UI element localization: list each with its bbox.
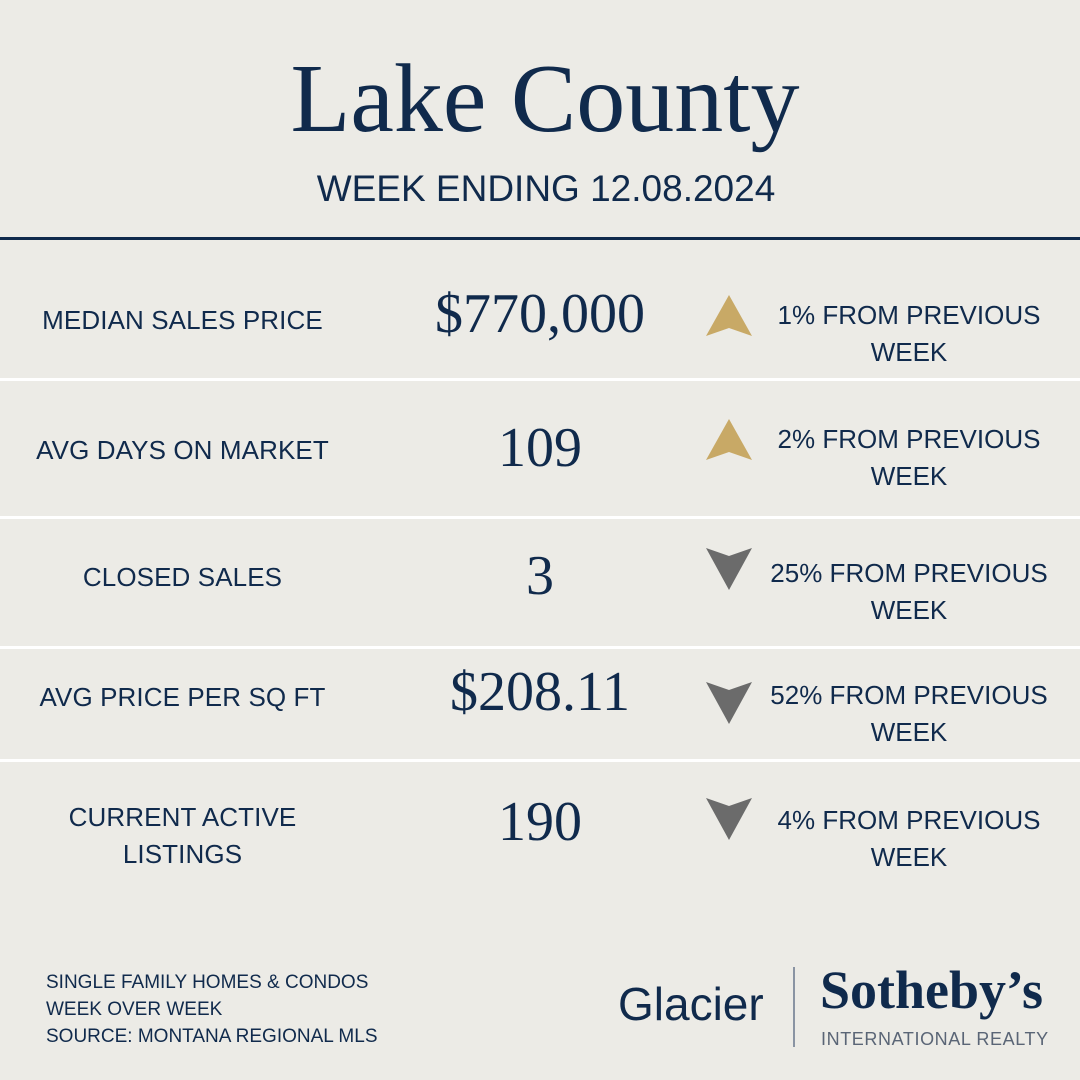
change text: WEEK — [871, 595, 947, 625]
icon: up arrow — [706, 419, 752, 460]
row: closed sales — [83, 545, 1048, 625]
label — [69, 802, 296, 869]
change text — [778, 424, 1040, 491]
logo: Sotheby’s — [820, 960, 1043, 1020]
change text: 25% FROM PREVIOUS — [770, 558, 1048, 588]
label: CURRENT ACTIVE — [69, 802, 296, 832]
footnote: WEEK OVER WEEK — [46, 999, 222, 1020]
change text: 52% FROM PREVIOUS — [770, 680, 1048, 710]
value: $770,000 — [435, 283, 645, 345]
change text: 4% FROM PREVIOUS — [778, 805, 1040, 835]
value: 3 — [526, 545, 554, 607]
change text: WEEK — [871, 461, 947, 491]
change text: WEEK — [871, 842, 947, 872]
icon: up arrow — [706, 295, 752, 336]
value: 190 — [498, 791, 582, 853]
footnote: SINGLE FAMILY HOMES & CONDOS — [46, 972, 368, 993]
subtitle: WEEK ENDING 12.08.2024 — [317, 168, 775, 209]
title: Lake County — [291, 45, 799, 153]
logo: INTERNATIONAL REALTY — [821, 1029, 1049, 1049]
row: avg price per sq ft — [39, 661, 1048, 747]
change text: WEEK — [871, 337, 947, 367]
change text — [770, 680, 1048, 747]
change text: 2% FROM PREVIOUS — [778, 424, 1040, 454]
change text: 1% FROM PREVIOUS — [778, 300, 1040, 330]
footnote: SOURCE: MONTANA REGIONAL MLS — [46, 1026, 378, 1047]
label: AVG DAYS ON MARKET — [36, 435, 329, 465]
icon: down arrow — [706, 548, 752, 590]
logo — [618, 960, 1049, 1049]
icon: down arrow — [706, 682, 752, 724]
row: avg days on market — [36, 417, 1040, 491]
value: 109 — [498, 417, 582, 479]
label: LISTINGS — [123, 839, 242, 869]
logo: Glacier — [618, 978, 764, 1030]
row: median sales price — [42, 283, 1040, 367]
change text — [778, 805, 1040, 872]
change text: WEEK — [871, 717, 947, 747]
label: CLOSED SALES — [83, 562, 282, 592]
row: current active listings — [69, 791, 1040, 872]
footnote — [46, 972, 378, 1047]
label: AVG PRICE PER SQ FT — [39, 682, 326, 712]
change text — [770, 558, 1048, 625]
value: $208.11 — [450, 661, 630, 723]
icon: down arrow — [706, 798, 752, 840]
label: MEDIAN SALES PRICE — [42, 305, 323, 335]
change text — [778, 300, 1040, 367]
